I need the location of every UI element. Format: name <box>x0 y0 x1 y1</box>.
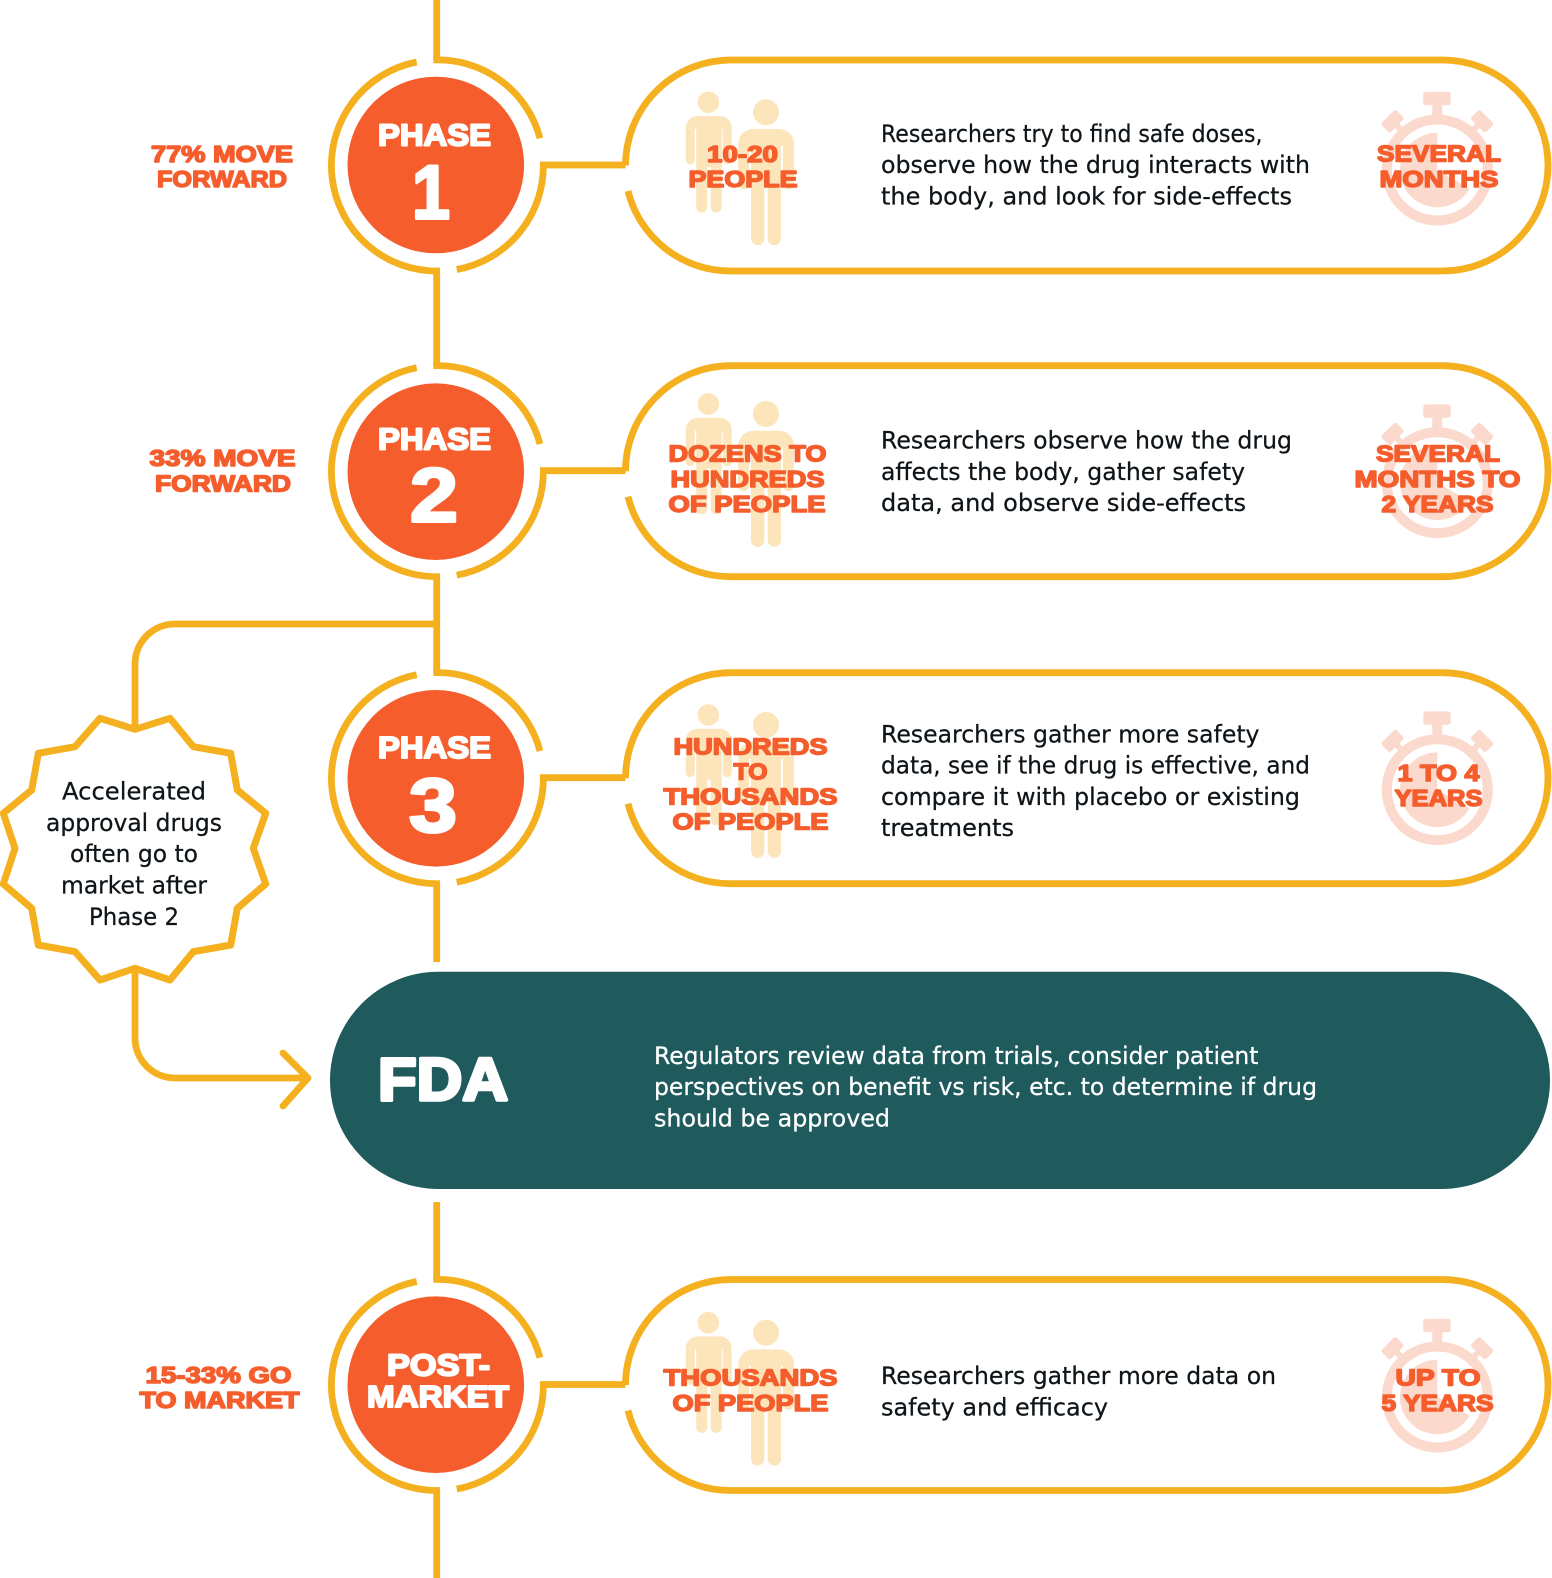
people count: HUNDREDS <box>674 734 828 760</box>
duration: SEVERAL <box>1376 440 1500 466</box>
duration: SEVERAL <box>1377 140 1501 166</box>
post-market badge <box>331 1279 543 1491</box>
people count: HUNDREDS <box>670 466 824 492</box>
icon: people <box>686 393 794 547</box>
duration <box>1394 760 1482 811</box>
row: phase 1 <box>151 60 1548 271</box>
duration: 1 TO 4 <box>1398 760 1480 786</box>
phase 1 pass rate: 77% MOVE <box>151 141 293 167</box>
phase 1 description: observe how the drug interacts with <box>881 151 1310 179</box>
people count: OF PEOPLE <box>672 808 828 834</box>
people count <box>664 1364 838 1416</box>
duration: YEARS <box>1394 785 1482 811</box>
duration: MONTHS <box>1380 166 1498 192</box>
phase 3 badge: 3 <box>409 764 457 848</box>
callout: accelerated approval starburst <box>3 718 266 980</box>
phase 1 description: the body, and look for side-effects <box>881 182 1292 210</box>
phase 1 pass rate: FORWARD <box>157 166 287 192</box>
phase 3 badge <box>331 673 543 884</box>
duration <box>1377 140 1501 192</box>
phase 1 description: Researchers try to find safe doses, <box>881 120 1262 148</box>
duration <box>1382 1364 1494 1416</box>
people count <box>668 440 826 517</box>
phase 2 description: Researchers observe how the drug <box>881 427 1292 455</box>
people count: PEOPLE <box>688 166 798 192</box>
phase 1 badge <box>331 60 543 271</box>
phase 3 description: Researchers gather more safety <box>881 720 1260 748</box>
phase 3 description: treatments <box>881 814 1014 842</box>
phase 1 badge: PHASE <box>378 118 491 152</box>
icon: stopwatch <box>1380 92 1494 220</box>
icon: people <box>686 92 794 245</box>
icon: stopwatch <box>1380 404 1494 533</box>
post-market rate <box>140 1362 300 1413</box>
phase 2 description: data, and observe side-effects <box>881 489 1246 517</box>
people count <box>688 141 798 192</box>
phase 2 badge: PHASE <box>378 422 491 456</box>
duration <box>1354 440 1520 517</box>
callout: accelerated approval starburst: Accelerated <box>62 777 206 805</box>
post-market rate: 15-33% GO <box>146 1362 292 1388</box>
phase 2 pass rate: FORWARD <box>155 470 291 496</box>
duration: 5 YEARS <box>1382 1390 1494 1416</box>
phase 1 badge: 1 <box>412 150 450 236</box>
FDA description: should be approved <box>654 1104 890 1132</box>
post-market description: Researchers gather more data on <box>881 1362 1276 1390</box>
phase 3 description: compare it with placebo or existing <box>881 783 1300 811</box>
phase 1 pill outline <box>540 60 1548 271</box>
phase 2 description <box>881 427 1292 517</box>
phase 1 pass rate <box>151 141 293 192</box>
duration: UP TO <box>1396 1364 1480 1390</box>
row: post-market <box>140 1279 1548 1491</box>
FDA heading: FDA <box>378 1046 508 1113</box>
phase 2 pill outline <box>540 366 1548 577</box>
post-market rate: TO MARKET <box>140 1387 300 1413</box>
post-market badge: MARKET <box>367 1379 509 1414</box>
people count: THOUSANDS <box>664 1364 838 1390</box>
people count: THOUSANDS <box>664 784 838 810</box>
FDA description: perspectives on benefit vs risk, etc. to determine if drug <box>654 1073 1317 1101</box>
accelerated approval route with arrow <box>135 624 437 1106</box>
icon: people <box>686 1312 794 1466</box>
people count: 10-20 <box>707 141 778 167</box>
icon: stopwatch <box>1380 1319 1494 1448</box>
phase 3 description <box>881 720 1310 842</box>
callout: accelerated approval starburst: market after <box>61 872 207 900</box>
phase 3 pill outline <box>540 673 1548 884</box>
phase 2 description: affects the body, gather safety <box>881 458 1245 486</box>
callout: accelerated approval starburst: approval drugs <box>46 809 222 837</box>
post-market description <box>881 1362 1276 1421</box>
row: phase 2 <box>150 366 1548 577</box>
people count: OF PEOPLE <box>668 491 826 517</box>
duration: 2 YEARS <box>1382 491 1494 517</box>
phase 2 badge: 2 <box>410 454 458 538</box>
FDA description: Regulators review data from trials, consider patient <box>654 1042 1258 1070</box>
timeline vertical connector <box>433 0 440 1578</box>
people count: OF PEOPLE <box>672 1390 828 1416</box>
phase 1 description <box>881 120 1310 210</box>
post-market description: safety and efficacy <box>881 1393 1108 1421</box>
row: phase 3 <box>331 673 1548 884</box>
duration: MONTHS TO <box>1354 466 1520 492</box>
post-market badge: POST- <box>387 1348 490 1382</box>
icon: stopwatch <box>1380 711 1494 840</box>
phase 3 description: data, see if the drug is effective, and <box>881 752 1310 780</box>
post-market pill outline <box>540 1280 1548 1491</box>
phase 2 badge <box>331 366 543 577</box>
callout: accelerated approval starburst: often go to <box>70 840 198 868</box>
panel: FDA <box>330 972 1550 1189</box>
phase 2 pass rate: 33% MOVE <box>150 445 296 471</box>
icon: people <box>686 704 794 858</box>
phase 3 badge: PHASE <box>378 730 491 765</box>
FDA description <box>654 1042 1317 1132</box>
callout: accelerated approval starburst: Phase 2 <box>89 903 179 931</box>
people count <box>664 734 838 834</box>
people count: TO <box>734 758 768 784</box>
people count: DOZENS TO <box>668 440 826 466</box>
phase 2 pass rate <box>150 445 296 496</box>
